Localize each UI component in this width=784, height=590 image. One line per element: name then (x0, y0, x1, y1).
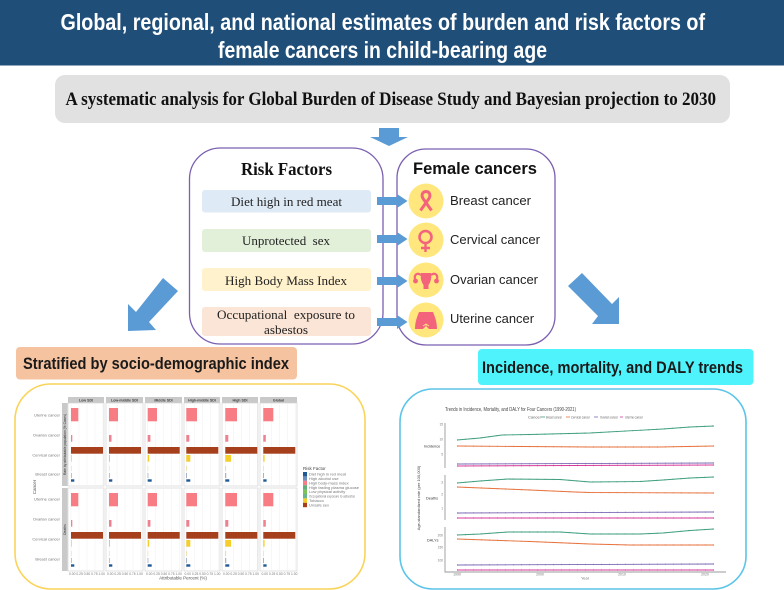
panel: risk factors (190, 148, 383, 344)
facet panel frames and grid (68, 403, 297, 571)
heading: stratified by socio-demographic index (16, 347, 297, 380)
risk factor: body mass index (202, 268, 371, 291)
arrow: down-right to trends chart (568, 273, 619, 324)
facet titles: Global (273, 398, 284, 402)
panel: trends line chart (400, 389, 746, 589)
subtitle box: A systematic analysis for Global Burden of Disease Study and Bayesian projection to 2030 (66, 89, 716, 110)
y axis tick labels (438, 422, 443, 562)
icon: ribbon, breast cancer (408, 184, 444, 218)
y axis category labels: Breast cancer (35, 556, 61, 562)
facet titles: Low SDI (79, 398, 93, 402)
x axis tick labels: 0.00 0.25 0.50 0.75 1.00 (223, 572, 259, 576)
series: cervical cancer (457, 446, 714, 545)
facet titles: High SDI (233, 398, 247, 402)
y axis tick labels: 1 (441, 506, 443, 510)
risk factor: asbestos (202, 307, 371, 337)
x axis tick labels: Year (581, 576, 590, 580)
risk factor: body mass index: High Body Mass Index (225, 273, 348, 288)
risk factor: asbestos: asbestos (264, 322, 308, 337)
bars: bottom row (71, 493, 295, 567)
x axis tick labels: 0.00 0.25 0.50 0.75 1.00 (107, 572, 143, 576)
heading: incidence, mortality and DALY trends: Incidence, mortality, and DALY trends (482, 358, 743, 377)
arrow: down to panels (370, 128, 408, 146)
facet strips left: Deaths (63, 524, 67, 535)
label: uterine cancer: Uterine cancer (450, 311, 535, 326)
facet row labels: Deaths (426, 496, 438, 500)
title banner (0, 0, 784, 66)
arrow: body mass index to ovarian cancer (377, 274, 408, 288)
arrow: asbestos to uterine cancer (377, 315, 408, 329)
risk factor: unprotected sex: Unprotected sex (242, 233, 330, 248)
legend: risk factor: Unsafe sex (309, 502, 329, 507)
series: breast cancer (457, 426, 714, 535)
icon: uterus, ovarian cancer (408, 262, 444, 298)
y axis tick labels: 150 (438, 546, 443, 550)
chart legend: Breast cancer (546, 416, 563, 420)
x axis tick labels: 0.00 0.25 0.50 0.75 1.00 (184, 572, 221, 576)
legend: risk factor: High body-mass index (309, 480, 349, 485)
y axis category labels: Cervical cancer (32, 452, 61, 458)
heading: stratified by socio-demographic index: Stratified by socio-demographic index (23, 354, 289, 373)
heading: incidence, mortality and DALY trends (478, 349, 754, 385)
x axis tick labels (69, 572, 298, 576)
subtitle box (55, 75, 730, 123)
x axis tick labels: 0.00 0.25 0.50 0.75 1.00 (262, 572, 298, 576)
arrow: unprotected sex to cervical cancer (377, 232, 408, 246)
chart axes (445, 423, 726, 572)
x axis tick labels: 2010 (618, 572, 626, 576)
chart legend (528, 414, 644, 420)
facet titles: High-middle SDI (188, 398, 216, 402)
x axis tick labels: 0.00 0.25 0.50 0.75 1.00 (69, 572, 105, 576)
y axis category labels: Ovarian cancer (33, 516, 61, 522)
y axis title: Age-standardized rate (per 100,000) (416, 465, 421, 530)
label: cervical cancer: Cervical cancer (450, 232, 541, 247)
title banner: female cancers in child-bearing age (218, 37, 547, 63)
y axis category labels: Breast cancer (35, 472, 61, 476)
icon: female symbol, cervical cancer (408, 222, 444, 258)
x axis tick labels: 1990 (453, 572, 461, 576)
facet strips left: Rate by attributable population (% Cases) (63, 414, 67, 475)
icon: pelvis, uterine cancer (408, 302, 444, 338)
legend: risk factor: High alcohol use (309, 476, 339, 481)
panel: female cancers (397, 149, 555, 345)
facet titles: Low-middle SDI (111, 398, 138, 402)
chart legend: Cervical cancer (571, 416, 591, 420)
y axis category labels: Cervical cancer (32, 536, 61, 542)
y axis tick labels: 100 (438, 558, 443, 562)
panel: stratified bar chart (15, 384, 365, 589)
y axis category labels: Ovarian cancer (33, 432, 61, 438)
facet row labels (424, 444, 440, 542)
x axis tick labels (453, 572, 709, 580)
chart legend: Cancer (528, 414, 542, 420)
y axis tick labels: 15 (439, 422, 443, 426)
x axis tick labels: 2020 (701, 572, 709, 576)
facet titles: Middle SDI (154, 398, 173, 402)
legend: risk factor: High fasting plasma glucose (309, 485, 360, 490)
heading: risk factors: Risk Factors (241, 159, 332, 179)
legend: risk factor: Tobacco (309, 498, 325, 503)
arrow: down-left to stratified chart (128, 278, 178, 331)
chart legend: Ovarian cancer (600, 416, 619, 420)
bars: top row (71, 408, 295, 482)
facet strips top (68, 397, 297, 403)
risk factor: unprotected sex (202, 229, 371, 252)
facet strips left (62, 403, 68, 571)
y axis title: Cancer (32, 479, 37, 494)
legend: risk factor: Low physical activity (309, 489, 345, 494)
chart title: Trends in Incidence, Mortality, and DALY for Four Cancers (1990-2021) (445, 407, 576, 413)
facet row labels: DALYs (427, 538, 439, 542)
x axis title: Attributable Percent (%) (159, 576, 207, 580)
y axis tick labels: 200 (438, 534, 443, 538)
facet row labels: Incidence (424, 444, 440, 448)
series: uterine cancer (457, 465, 714, 570)
risk factor: red meat (202, 190, 371, 212)
arrow: red meat to breast cancer (377, 194, 408, 208)
y axis tick labels: 3 (441, 480, 443, 484)
label: ovarian cancer: Ovarian cancer (450, 272, 539, 287)
risk factor: asbestos: Occupational exposure to (217, 307, 355, 322)
label: breast cancer: Breast cancer (450, 193, 532, 208)
x axis tick labels: 0.00 0.25 0.50 0.75 1.00 (146, 572, 182, 576)
legend: risk factor (303, 466, 360, 507)
facet titles (79, 398, 284, 402)
y axis category labels (32, 412, 61, 562)
legend: risk factor: Risk Factor (303, 466, 326, 471)
series: ovarian cancer (457, 463, 714, 565)
y axis category labels: Uterine cancer (34, 496, 61, 502)
legend: risk factor: Diet high in red meat (309, 472, 347, 476)
heading: female cancers: Female cancers (413, 160, 537, 178)
chart legend: Uterine cancer (625, 416, 644, 420)
y axis tick labels: 5 (441, 452, 443, 456)
x axis tick labels: 2000 (536, 572, 544, 576)
y axis tick labels: 10 (439, 438, 443, 442)
y axis tick labels: 2 (441, 492, 443, 496)
y axis category labels: Uterine cancer (34, 412, 61, 418)
risk factor: red meat: Diet high in red meat (231, 194, 342, 209)
legend: risk factor: Occupational exposure to asbestos (309, 494, 355, 499)
